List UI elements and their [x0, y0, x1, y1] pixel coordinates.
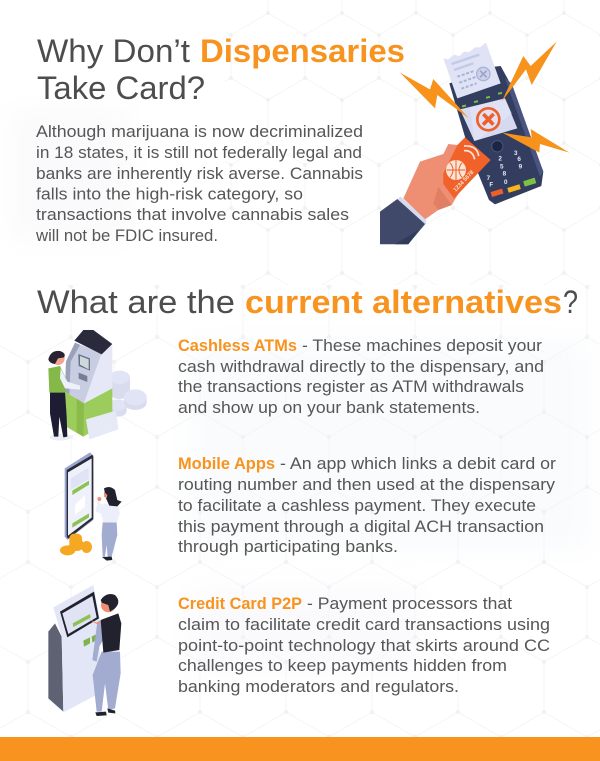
keypad: 5: [500, 163, 504, 170]
intro text block: transactions that involve cannabis sales: [36, 205, 349, 224]
title: Why Don't Dispensaries Take Card?: [37, 33, 405, 106]
keypad: [487, 150, 523, 189]
icon: person: [48, 351, 80, 441]
title: Why Don't Dispensaries Take Card?: Why Don’t: [37, 33, 190, 69]
keypad: 8: [503, 170, 507, 177]
Mobile Apps text block: to facilitate a cashless payment. They execute: [178, 496, 536, 515]
keypad: 9: [519, 163, 523, 170]
keypad: 2: [498, 156, 502, 163]
intro text block: Although marijuana is now decriminalized: [36, 122, 363, 141]
Credit Card P2P text block: - Payment processors that: [307, 594, 512, 613]
Mobile Apps text block: through participating banks.: [178, 537, 398, 556]
intro text block: in 18 states, it is still not federally legal and: [36, 143, 362, 162]
intro text block: will not be FDIC insured.: [35, 226, 218, 245]
icon: smartphone: [65, 452, 93, 540]
heading: What are the current alternatives?: [37, 284, 578, 320]
intro text block: falls into the high-risk category, so: [36, 184, 303, 204]
Credit Card P2P text block: [178, 594, 550, 696]
Cashless ATMs text block: the transactions register as ATM withdrawals: [178, 377, 524, 396]
Cashless ATMs text block: - These machines deposit your: [302, 336, 542, 355]
illustration: person using giant phone app: [60, 452, 122, 561]
intro text block: [35, 122, 363, 245]
Mobile Apps text block: Mobile Apps: [178, 454, 275, 473]
icon: man: [87, 594, 121, 716]
heading: What are the current alternatives?: current alternatives: [245, 284, 562, 320]
icon: hand holding card: [380, 137, 491, 244]
heading: What are the current alternatives?: ?: [563, 284, 578, 320]
Credit Card P2P text block: challenges to keep payments hidden from: [178, 656, 507, 675]
Mobile Apps text block: this payment through a digital ACH transaction: [178, 517, 544, 536]
icon: bank card: [86, 411, 118, 439]
heading: What are the current alternatives?: What are the: [37, 284, 235, 320]
title: Why Don't Dispensaries Take Card?: Dispensaries: [200, 33, 405, 69]
keypad: 6: [517, 156, 521, 163]
icon: declined X mark: [477, 108, 499, 130]
icon: woman: [95, 487, 122, 561]
footer orange bar: [0, 737, 600, 761]
icon: receipt: [443, 43, 501, 98]
keypad: F: [489, 182, 493, 189]
Mobile Apps text block: routing number and then used at the dispensary: [178, 475, 556, 494]
icon: stacked coins: [109, 371, 147, 417]
icon: hand holding card: 1234 5678: [453, 170, 475, 193]
icon: ATM machine: [65, 330, 112, 437]
Cashless ATMs text block: Cashless ATMs: [178, 336, 297, 355]
illustration: hand with card at declined payment terminal: [380, 42, 569, 244]
icon: lightning bolts: [400, 42, 569, 153]
Cashless ATMs text block: [178, 336, 544, 417]
intro text block: banks are inherently risk averse. Cannabis: [36, 164, 363, 183]
keypad: 0: [504, 179, 508, 186]
keypad: 3: [514, 150, 518, 157]
title: Why Don't Dispensaries Take Card?: Take Card?: [37, 70, 205, 106]
icon: card terminal: [449, 66, 543, 204]
icon: gold coins: [60, 534, 92, 555]
Cashless ATMs text block: and show up on your bank statements.: [178, 398, 480, 417]
icon: kiosk: [48, 585, 100, 712]
Credit Card P2P text block: point-to-point technology that skirts around CC: [178, 636, 550, 655]
Credit Card P2P text block: claim to facilitate credit card transactions using: [178, 615, 550, 634]
Credit Card P2P text block: Credit Card P2P: [178, 594, 302, 613]
illustration: person at payment kiosk: [48, 585, 121, 716]
Mobile Apps text block: [178, 454, 556, 556]
keypad: 7: [487, 175, 491, 182]
Cashless ATMs text block: cash withdrawal directly to the dispensary, and: [178, 357, 544, 376]
illustration: person at cashless ATM: [48, 330, 147, 441]
Mobile Apps text block: - An app which links a debit card or: [280, 454, 556, 473]
Credit Card P2P text block: banking moderators and regulators.: [178, 677, 459, 696]
